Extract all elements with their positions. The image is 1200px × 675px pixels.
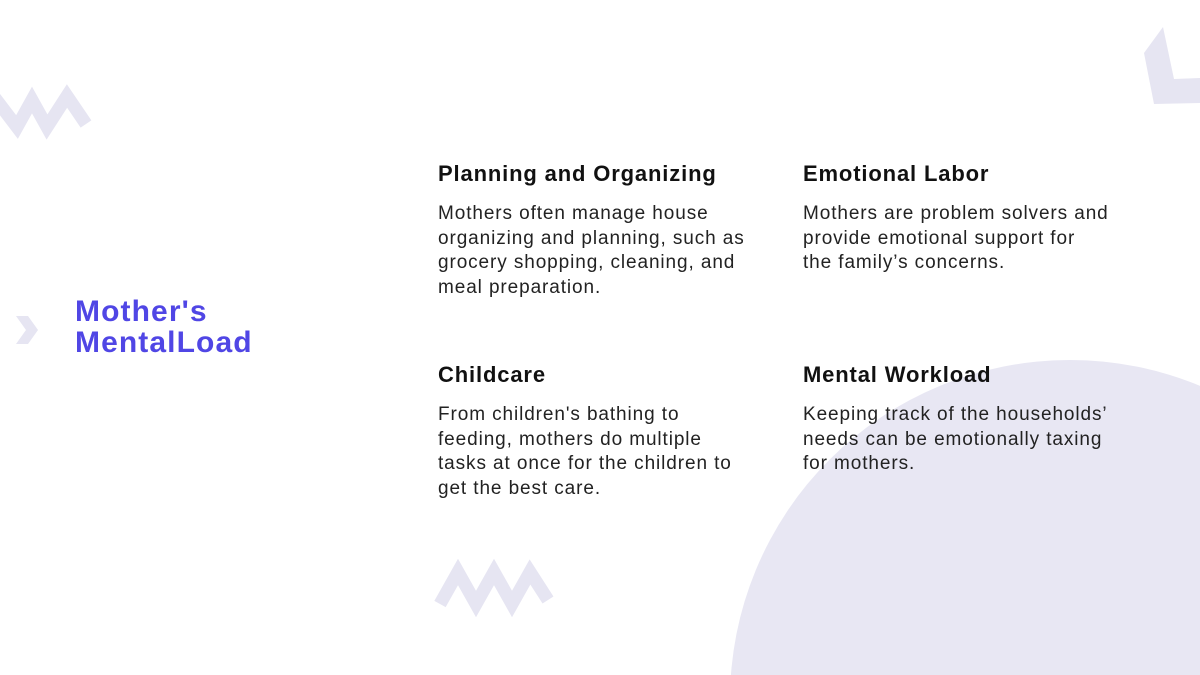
zigzag top left	[0, 96, 86, 127]
chevron left	[16, 316, 38, 344]
heading: emotional: Emotional Labor	[803, 161, 989, 186]
heading: mental workload: Mental Workload	[803, 362, 991, 387]
zigzag bottom middle	[440, 572, 548, 604]
text: childcare: From children's bathing to	[438, 404, 679, 425]
text: planning	[438, 203, 745, 298]
text: mental workload: for mothers.	[803, 453, 915, 474]
text: childcare: get the best care.	[438, 478, 601, 498]
title: Mother's	[75, 295, 208, 328]
heading: childcare: Childcare	[438, 362, 546, 387]
text: mental workload: needs can be emotionally taxing	[803, 428, 1102, 450]
title	[75, 295, 253, 359]
text: childcare: feeding, mothers do multiple	[438, 428, 702, 450]
text: emotional	[803, 203, 1109, 273]
text: emotional: the family’s concerns.	[803, 252, 1005, 273]
text: emotional: provide emotional support for	[803, 228, 1075, 248]
text: planning: meal preparation.	[438, 276, 601, 298]
text: emotional: Mothers are problem solvers and	[803, 203, 1109, 224]
text: planning: organizing and planning, such as	[438, 228, 745, 248]
text: mental workload: Keeping track of the households’	[803, 404, 1108, 425]
text: childcare: tasks at once for the children to	[438, 453, 732, 474]
title: MentalLoad	[75, 326, 253, 359]
circle bottom right	[730, 360, 1200, 675]
text: childcare	[438, 404, 732, 498]
text: planning: grocery shopping, cleaning, and	[438, 252, 735, 273]
top right shape	[1144, 27, 1200, 104]
text: planning: Mothers often manage house	[438, 203, 709, 224]
text: mental workload	[803, 404, 1108, 474]
heading: planning: Planning and Organizing	[438, 161, 717, 186]
